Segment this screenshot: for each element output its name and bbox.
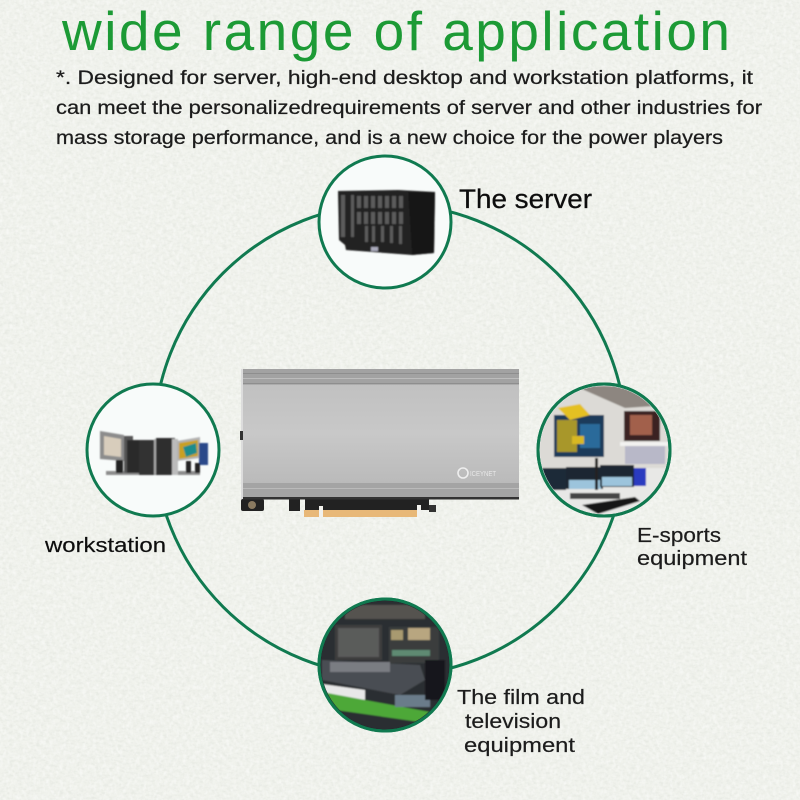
node: server bbox=[319, 156, 451, 288]
connecting ring bbox=[154, 204, 626, 676]
label: e-sports equipment: equipment bbox=[637, 547, 747, 570]
label: film and television equipment bbox=[457, 686, 585, 757]
intro text block: can meet the personalizedrequirements of server and other industries for bbox=[56, 97, 763, 119]
label: film and television equipment: The film and bbox=[457, 686, 585, 709]
product: NVMe adapter card bbox=[240, 369, 519, 517]
icon: editing console photo bbox=[321, 604, 444, 722]
icon: workstations and monitors bbox=[100, 431, 208, 475]
label: e-sports equipment bbox=[637, 524, 747, 570]
label: film and television equipment: equipment bbox=[464, 734, 575, 757]
label: the server: The server bbox=[459, 184, 592, 214]
label: e-sports equipment: E-sports bbox=[637, 524, 721, 547]
node: e-sports bbox=[538, 384, 670, 516]
label: workstation: workstation bbox=[44, 534, 166, 557]
intro text block bbox=[56, 67, 763, 149]
icon: gaming room photo bbox=[538, 384, 670, 516]
intro text block: *. Designed for server, high-end desktop and workstation platforms, it bbox=[56, 67, 754, 89]
node: workstation bbox=[87, 384, 219, 516]
intro text block: mass storage performance, and is a new choice for the power players bbox=[56, 127, 723, 149]
brand logo: ICEYNET bbox=[470, 471, 497, 478]
node: film and television bbox=[319, 599, 451, 731]
icon: blade server bbox=[338, 190, 435, 255]
label: film and television equipment: television bbox=[465, 710, 561, 733]
card bracket and connector bbox=[240, 369, 436, 517]
heatsink body bbox=[243, 369, 519, 500]
brand logo bbox=[458, 468, 497, 478]
title: wide range of application bbox=[61, 0, 730, 62]
